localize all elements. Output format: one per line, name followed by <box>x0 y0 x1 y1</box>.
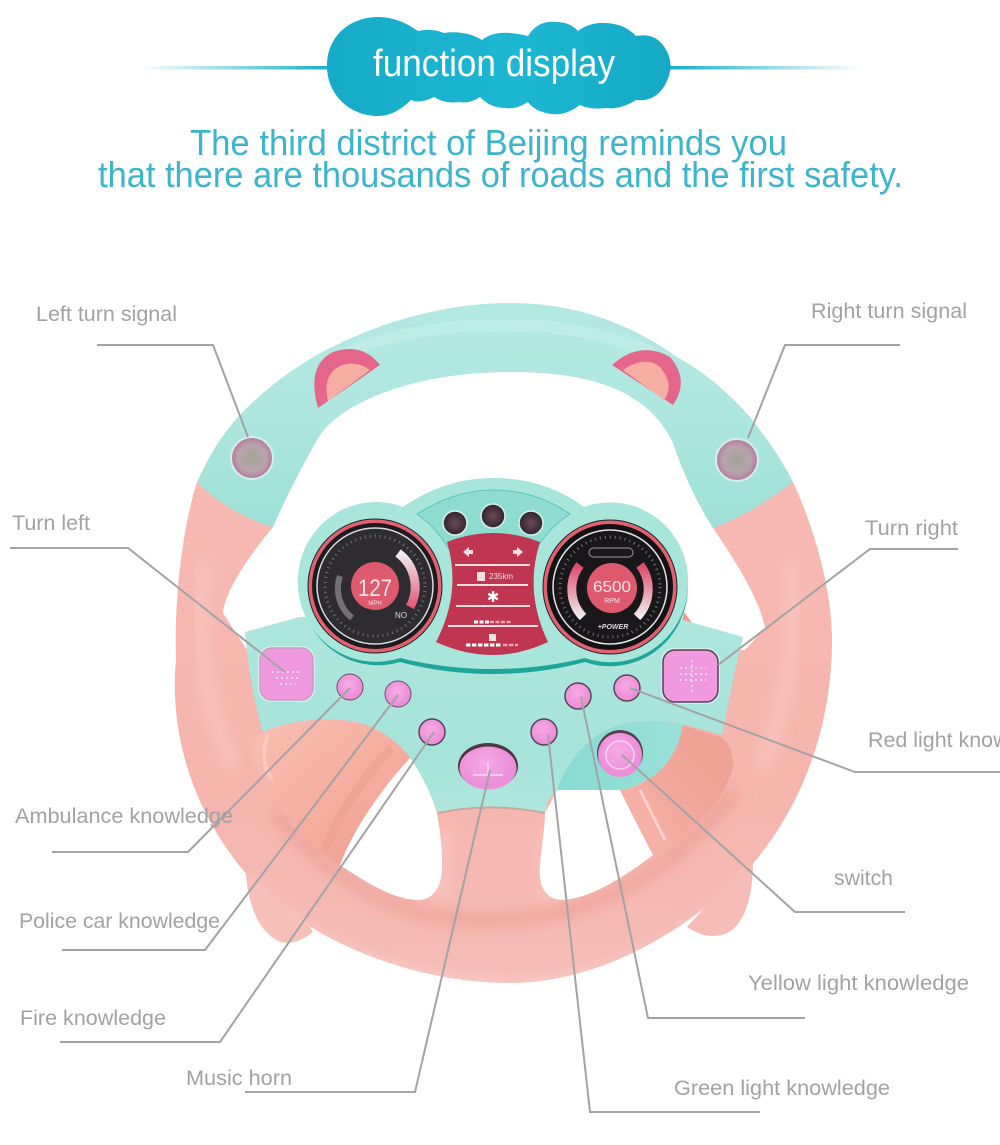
stand feet <box>245 862 753 943</box>
centre red display <box>436 533 548 655</box>
callout: Yellow light knowledge <box>581 697 969 1018</box>
music horn button <box>458 743 518 790</box>
callout: Turn right <box>718 517 958 665</box>
left lower opening <box>340 758 442 900</box>
right ear accent <box>612 350 681 405</box>
left speed gauge: NO <box>395 611 407 620</box>
wheel rim <box>175 482 832 983</box>
callout: Right turn signal: Right turn signal <box>811 300 967 323</box>
callout: Left turn signal <box>36 303 248 437</box>
callout: Music horn: Music horn <box>186 1067 292 1090</box>
subtitle heading <box>98 122 903 195</box>
indicator lights <box>443 504 543 535</box>
teal upper band <box>197 303 793 528</box>
callout: Police car knowledge <box>19 695 398 950</box>
cloud badge: function display <box>327 17 670 116</box>
right rpm gauge: RPM <box>604 598 620 605</box>
callout: Turn left <box>10 512 285 672</box>
switch pocket <box>557 722 683 790</box>
yellow light button <box>565 683 591 709</box>
callout: Yellow light knowledge: Yellow light knowledge <box>748 972 969 995</box>
left speed gauge <box>308 519 442 653</box>
left ear accent <box>314 349 380 408</box>
right inner surface <box>620 725 733 855</box>
rim shading <box>201 560 793 985</box>
red light button <box>614 675 640 701</box>
header divider line <box>140 66 860 70</box>
callout: Fire knowledge <box>20 732 434 1042</box>
hub panel <box>245 617 743 813</box>
right rpm gauge: 6500 <box>593 579 631 596</box>
police button <box>385 681 411 707</box>
centre red display: ✱ <box>487 589 499 606</box>
subtitle heading: that there are thousands of roads and the first safety. <box>98 154 903 195</box>
right arrow button <box>661 648 720 704</box>
left speed gauge: MPH <box>368 601 382 607</box>
callout: Music horn <box>186 770 490 1092</box>
power switch button <box>597 730 643 777</box>
right rpm gauge: +POWER <box>598 624 628 631</box>
callout: Turn right: Turn right <box>865 517 958 540</box>
callout: Green light knowledge <box>548 735 890 1112</box>
callout: Green light knowledge: Green light knowledge <box>674 1077 890 1100</box>
salmon peek behind right gauge <box>680 612 696 630</box>
centre red display: 235km <box>489 572 513 581</box>
right rpm gauge <box>543 520 677 654</box>
callout: Left turn signal: Left turn signal <box>36 303 177 326</box>
fire button <box>419 719 445 745</box>
left speed gauge: 127 <box>358 575 392 602</box>
callout: switch <box>622 755 905 912</box>
callout: Fire knowledge: Fire knowledge <box>20 1007 166 1030</box>
cloud badge: function display: function display <box>373 43 615 85</box>
left inner surface <box>252 720 410 865</box>
upper wheel opening <box>223 372 765 650</box>
right lower opening <box>540 790 653 900</box>
callout: switch: switch <box>834 867 893 890</box>
callout: Red light knowledge <box>630 688 1000 772</box>
green light button <box>531 719 557 745</box>
callout: Ambulance knowledge: Ambulance knowledge <box>15 805 233 828</box>
ambulance button <box>337 674 363 700</box>
dashboard housing <box>298 478 688 674</box>
subtitle heading: The third district of Beijing reminds you <box>190 122 787 163</box>
left turn light <box>231 437 273 479</box>
callout: Ambulance knowledge <box>15 688 350 852</box>
right turn light <box>716 439 758 481</box>
left arrow button <box>258 646 315 702</box>
callout: Police car knowledge: Police car knowledge <box>19 910 220 933</box>
callout: Right turn signal <box>748 300 967 438</box>
callout: Turn left: Turn left <box>12 512 90 535</box>
steering wheel toy <box>175 303 832 985</box>
